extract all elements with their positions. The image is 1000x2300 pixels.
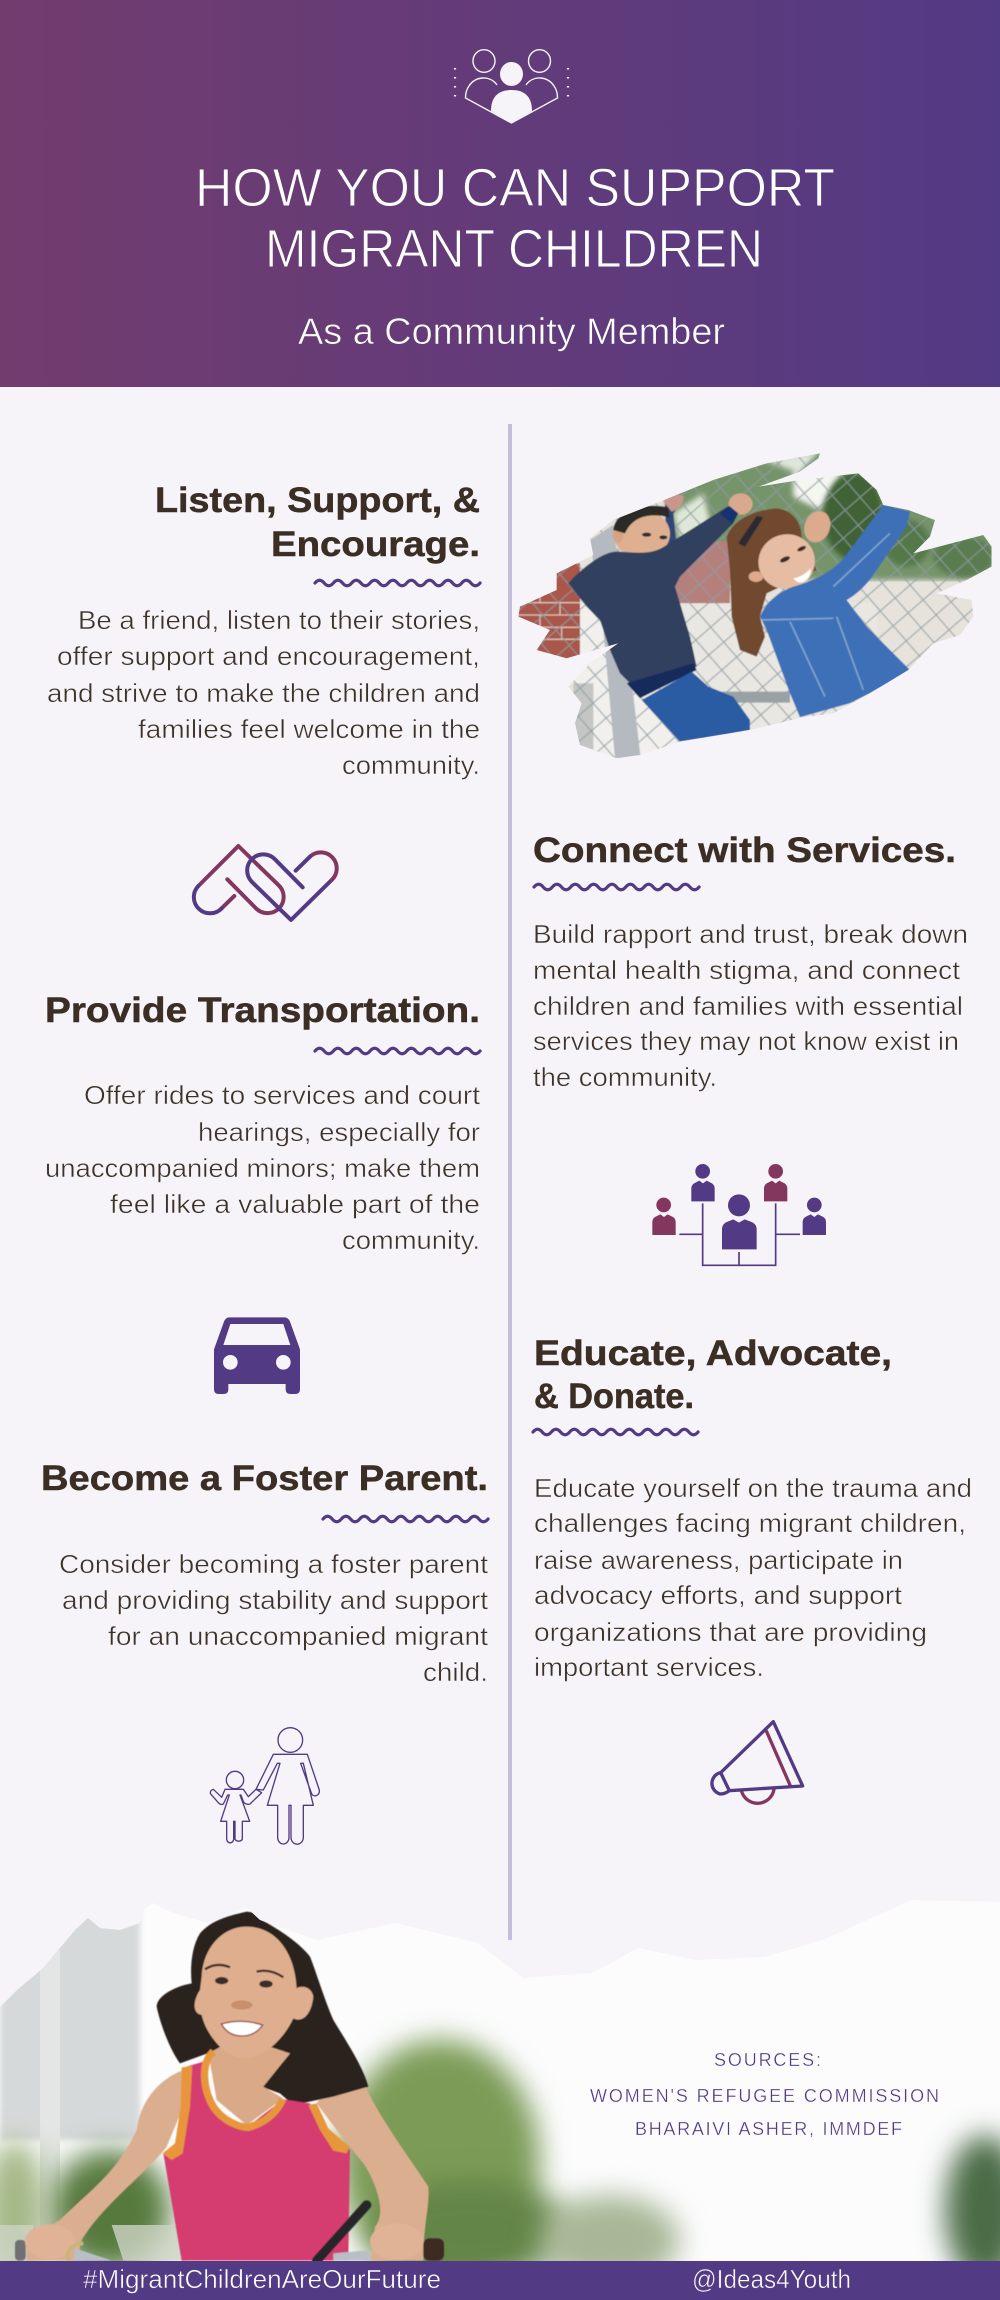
handle: @Ideas4Youth [692,2264,851,2294]
wavy underline [315,1048,480,1054]
text block: and strive to make the children and [47,678,480,708]
text block: and providing stability and support [62,1585,489,1615]
heading: & Donate. [534,1377,694,1416]
heading [534,1334,892,1416]
text block: organizations that are providing [534,1617,927,1647]
panel: listen, support, encourage [47,481,480,780]
panel: become a foster parent [41,1459,489,1687]
subtitle: As a Community Member [298,311,725,352]
text block: hearings, especially for [198,1117,480,1147]
text block: Educate yourself on the trauma and [534,1473,972,1503]
brick wall [513,563,580,660]
heading: Connect with Services. [533,831,956,870]
text block: community. [342,1225,480,1255]
text block [59,1549,489,1687]
photo: children at fence [513,447,1000,763]
text block: services they may not know exist in [533,1026,959,1056]
text block: unaccompanied minors; make them [45,1153,480,1183]
boy [568,493,753,742]
hashtag: #MigrantChildrenAreOurFuture [83,2264,441,2294]
sources: BHARAIVI ASHER, IMMDEF [635,2119,902,2139]
photo: girl on bicycle [0,1911,1000,2261]
text block: advocacy efforts, and support [534,1580,903,1610]
text block: community. [342,750,480,780]
girl [727,505,910,717]
text block [534,1473,972,1682]
girl on bike [0,1912,444,2261]
sources: SOURCES: [714,2050,821,2070]
text block [45,1080,481,1255]
icon: car [214,1317,300,1394]
title: MIGRANT CHILDREN [265,219,763,279]
title: HOW YOU CAN SUPPORT [195,158,835,218]
heading [155,481,480,564]
text block: the community. [533,1062,717,1092]
center divider [508,424,512,1940]
wavy underline [315,580,480,586]
text block [47,605,480,780]
text block: for an unaccompanied migrant [108,1621,489,1651]
heading: Provide Transportation. [45,991,480,1030]
footer band [0,2261,1000,2300]
wavy underline [533,1429,698,1435]
text block: feel like a valuable part of the [110,1189,480,1219]
handlebars [15,2205,444,2261]
text block: important services. [534,1652,764,1682]
text block: Build rapport and trust, break down [533,919,968,949]
icon: people network [652,1164,826,1265]
icon: community heart [455,50,568,123]
panel: connect with services [533,831,968,1092]
text block: Consider becoming a foster parent [59,1549,489,1579]
sources: WOMEN'S REFUGEE COMMISSION [590,2086,939,2106]
panel: provide transportation [45,991,481,1255]
heading: Encourage. [271,525,480,564]
icon: parent and child [210,1728,319,1844]
text block: child. [423,1657,488,1687]
arms [27,2070,183,2261]
sources [590,2050,939,2139]
text block: Offer rides to services and court [84,1080,481,1110]
heading: Educate, Advocate, [534,1334,892,1373]
text block: offer support and encouragement, [57,641,480,671]
text block: Be a friend, listen to their stories, [78,605,480,635]
tank top [163,2062,350,2261]
text block: mental health stigma, and connect [533,955,961,985]
hair [157,1912,368,2105]
text block: children and families with essential [533,991,963,1021]
heading: Become a Foster Parent. [41,1459,488,1498]
wavy underline [534,884,699,890]
text block [533,919,968,1092]
pale box [0,2225,187,2261]
heading: Listen, Support, & [155,481,480,520]
neck and chest [208,2043,290,2125]
wavy underline [323,1516,488,1522]
text block: raise awareness, participate in [534,1545,903,1575]
text block: challenges facing migrant children, [534,1508,966,1538]
title [195,158,835,279]
face [195,1927,313,2058]
icon: linked hearts [194,846,337,920]
icon: megaphone [712,1722,803,1803]
panel: educate, advocate, donate [533,1334,972,1682]
text block: families feel welcome in the [138,714,480,744]
header banner [0,0,1000,387]
